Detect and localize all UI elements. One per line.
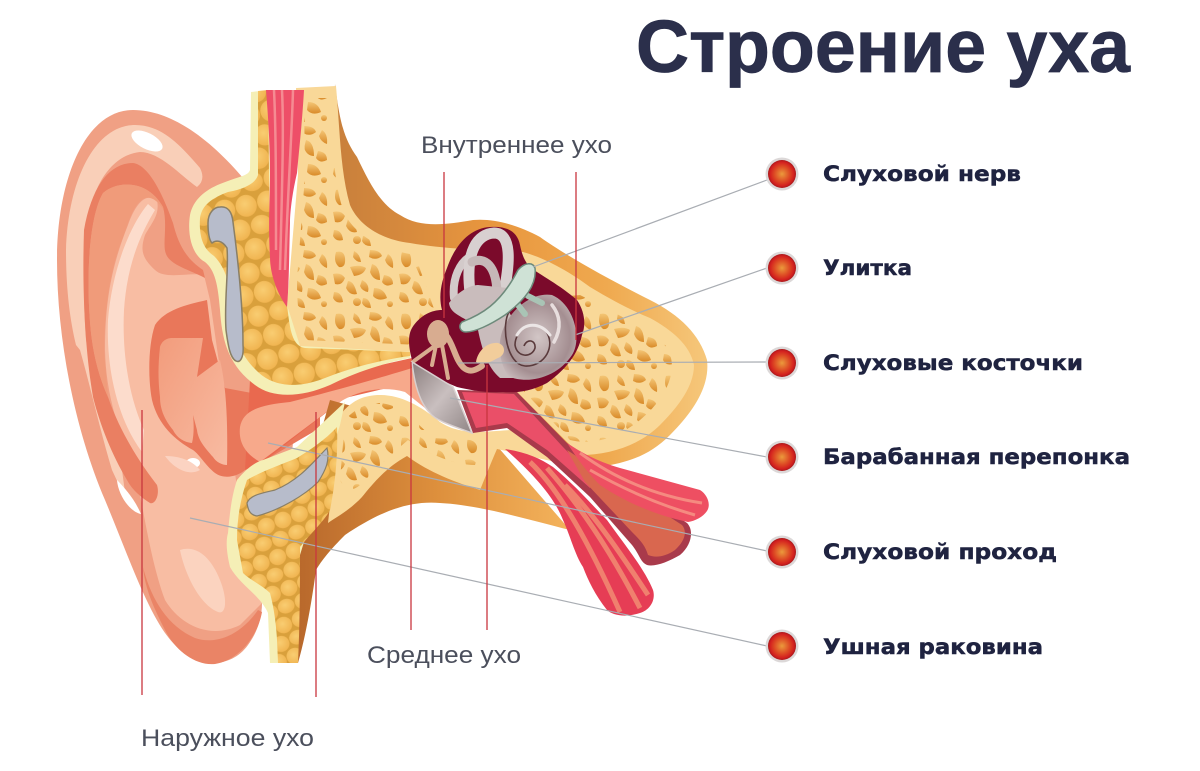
section label: middle ear: Среднее ухо — [367, 642, 521, 669]
marker and label: ossicles — [766, 346, 1083, 380]
ear canal — [240, 358, 472, 470]
upper cartilage grey — [208, 207, 243, 361]
marker and label: auricle — [766, 630, 1043, 662]
eardrum — [412, 362, 472, 433]
marker and label: auditory nerve: Слуховой нерв — [823, 162, 1021, 186]
temporal bone pale tissue — [287, 86, 694, 523]
marker and label: auditory nerve — [766, 158, 1021, 190]
eustachian tube — [457, 390, 691, 565]
ossicles — [414, 320, 504, 378]
temporal bone outer layer — [280, 84, 707, 663]
marker and label: eardrum: Барабанная перепонка — [823, 445, 1130, 469]
marker and label: auditory canal — [766, 536, 1057, 568]
marker and label: eardrum — [766, 440, 1130, 474]
concha inner — [158, 338, 227, 465]
lower muscle — [505, 449, 654, 616]
upper muscle — [266, 90, 304, 307]
marker and label: auricle: Ушная раковина — [823, 635, 1043, 659]
section label: outer ear: Наружное ухо — [141, 725, 314, 752]
vestibule — [478, 305, 525, 378]
lower rim — [143, 567, 262, 664]
scaphoid orange fill — [89, 185, 163, 397]
lobe highlight — [180, 549, 225, 612]
marker and label: ossicles: Слуховые косточки — [823, 351, 1083, 375]
tensor muscle — [567, 443, 709, 522]
antihelix and lobe body — [105, 198, 262, 631]
outer ear (auricle) — [57, 110, 320, 664]
lower cartilage grey — [247, 448, 328, 516]
red bracket lines — [142, 172, 576, 697]
semicircular canals — [454, 233, 508, 298]
section label: inner ear: Внутреннее ухо — [421, 132, 612, 159]
cartilage lower wall — [227, 402, 345, 663]
white highlights — [128, 126, 166, 156]
helix light band — [66, 125, 202, 500]
helix dark fold — [83, 163, 205, 503]
inner ear cavity — [409, 227, 584, 392]
marker and label: cochlea: Улитка — [823, 256, 912, 280]
antihelix highlight — [108, 204, 155, 452]
leader lines — [190, 180, 767, 646]
cartilage upper wall — [189, 90, 412, 395]
cochlea — [500, 295, 576, 380]
title: Строение уха — [636, 5, 1131, 88]
marker and label: auditory canal: Слуховой проход — [823, 540, 1057, 564]
auditory nerve — [460, 264, 542, 332]
concha dark fold — [149, 300, 320, 477]
marker and label: cochlea — [766, 252, 912, 284]
